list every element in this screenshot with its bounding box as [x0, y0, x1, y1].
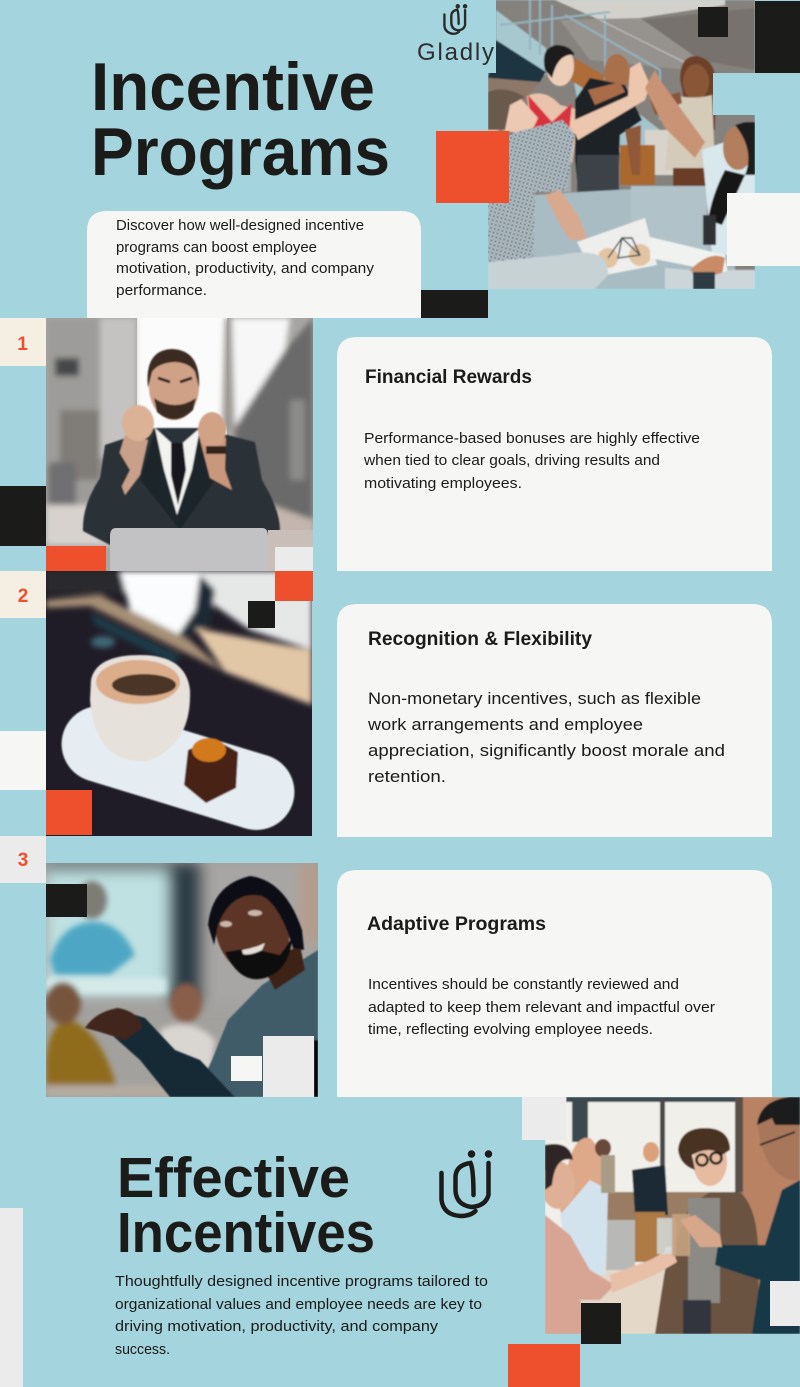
decorative block: black under photo — [421, 290, 488, 318]
card: recognition and flexibility: appreciation, significantly boost morale and — [368, 741, 725, 760]
sweater — [195, 950, 318, 1097]
decorative block: gray photo 3 — [263, 1036, 314, 1097]
high five arms — [570, 62, 705, 158]
title: Incentive — [91, 49, 375, 125]
decorative block: gray photo 4 right — [770, 1281, 800, 1326]
man in plaid — [488, 89, 575, 262]
closing text: Thoughtfully designed incentive programs tailored to — [115, 1273, 488, 1290]
decorative block: orange top left photo 1 — [46, 546, 106, 571]
decorative block: black small top — [698, 7, 728, 37]
closing heading: Incentives — [117, 1201, 375, 1265]
suit — [83, 428, 280, 545]
cup — [90, 655, 190, 761]
intro card — [87, 211, 421, 318]
step number 1: 1 — [17, 334, 28, 355]
hand — [85, 1008, 142, 1040]
decorative block: black photo 3 — [46, 884, 87, 917]
card: adaptive programs: time, reflecting evolving employee needs. — [368, 1021, 653, 1038]
step number 1 — [0, 318, 46, 366]
card: recognition and flexibility: Non-monetary incentives, such as flexible — [368, 689, 701, 708]
decorative block: orange — [436, 131, 509, 203]
icon: logo mark — [442, 1152, 490, 1216]
photo: colleagues toasting — [541, 1097, 800, 1334]
plate — [60, 706, 296, 831]
closing heading: Effective — [117, 1146, 350, 1210]
photo: businessman celebrating — [46, 318, 313, 571]
card: adaptive programs: Incentives should be constantly reviewed and — [368, 976, 679, 993]
step number 3 — [0, 836, 46, 883]
photo: coffee and brownie — [46, 571, 312, 839]
logo: Gladly — [417, 5, 494, 66]
card: financial rewards — [337, 337, 772, 571]
decorative block: blue notch — [713, 73, 755, 115]
card: adaptive programs: adapted to keep them relevant and impactful over — [368, 999, 715, 1016]
man in black — [575, 54, 642, 193]
white trousers — [488, 252, 608, 289]
card: recognition and flexibility: retention. — [368, 767, 446, 786]
card: recognition and flexibility: work arrangements and employee — [367, 715, 643, 734]
closing text: driving motivation, productivity, and company — [115, 1318, 439, 1335]
closing text — [115, 1273, 488, 1358]
card: financial rewards: when tied to clear goals, driving results and — [363, 452, 660, 469]
decorative block: black photo 4 — [581, 1303, 621, 1344]
decorative block: orange photo 2 bottom — [46, 790, 92, 835]
closing heading — [117, 1146, 375, 1265]
card: financial rewards: Financial Rewards — [365, 367, 532, 388]
photo: team high five — [488, 0, 755, 289]
decorative block: gray left bottom — [0, 1208, 23, 1387]
decorative block: white photo 3 — [231, 1056, 262, 1081]
step number 2: 2 — [18, 586, 28, 607]
pillow — [577, 218, 657, 277]
decorative block: white right — [727, 193, 800, 266]
card: recognition and flexibility — [337, 604, 772, 837]
man right — [680, 1097, 800, 1334]
fists — [115, 435, 148, 495]
intro card: motivation, productivity, and company — [116, 260, 375, 277]
head — [149, 354, 199, 420]
title — [91, 49, 390, 190]
photographer — [643, 1142, 659, 1162]
decorative block: gray photo 4 top — [522, 1097, 566, 1140]
woman in red — [527, 45, 580, 192]
shirt and tie — [155, 428, 200, 515]
decorative block: black top right — [755, 1, 800, 73]
card: recognition and flexibility: Recognition & Flexibility — [368, 629, 592, 650]
man back — [595, 1139, 611, 1157]
brownie — [184, 739, 238, 803]
woman front right — [702, 122, 755, 255]
closing text: success. — [115, 1341, 170, 1358]
card: adaptive programs — [337, 870, 772, 1097]
decorative block: gray photo 1 — [275, 547, 313, 571]
sofa — [530, 186, 735, 289]
card: financial rewards: Performance-based bonuses are highly effective — [364, 430, 700, 447]
woman in pink — [541, 1144, 677, 1334]
curly haired man — [655, 1128, 760, 1334]
decorative block: white left — [0, 731, 46, 790]
step number 3: 3 — [18, 850, 28, 871]
decorative block: black photo 2 — [248, 601, 275, 628]
title: Programs — [91, 114, 390, 190]
logo: Gladly: Gladly — [417, 39, 494, 66]
laptop — [110, 528, 268, 571]
intro card: Discover how well-designed incentive — [116, 217, 364, 234]
head — [215, 894, 290, 965]
step number 2 — [0, 571, 46, 618]
glasses — [657, 1218, 676, 1254]
card: financial rewards: motivating employees. — [364, 475, 522, 492]
arm on sofa — [545, 190, 588, 240]
intro card: performance. — [116, 282, 207, 299]
decorative block: orange photo 2 — [275, 571, 313, 601]
intro card: programs can boost employee — [116, 239, 317, 256]
decorative block: orange bottom — [508, 1344, 580, 1387]
photo: man in meeting — [45, 863, 318, 1097]
neck — [268, 947, 306, 990]
card: adaptive programs: Adaptive Programs — [367, 914, 546, 935]
clipboard — [650, 237, 728, 275]
blonde woman — [560, 1138, 607, 1270]
decorative block: black left — [0, 486, 46, 546]
closing text: organizational values and employee needs are key to — [115, 1296, 482, 1313]
woman in beige — [650, 56, 716, 188]
